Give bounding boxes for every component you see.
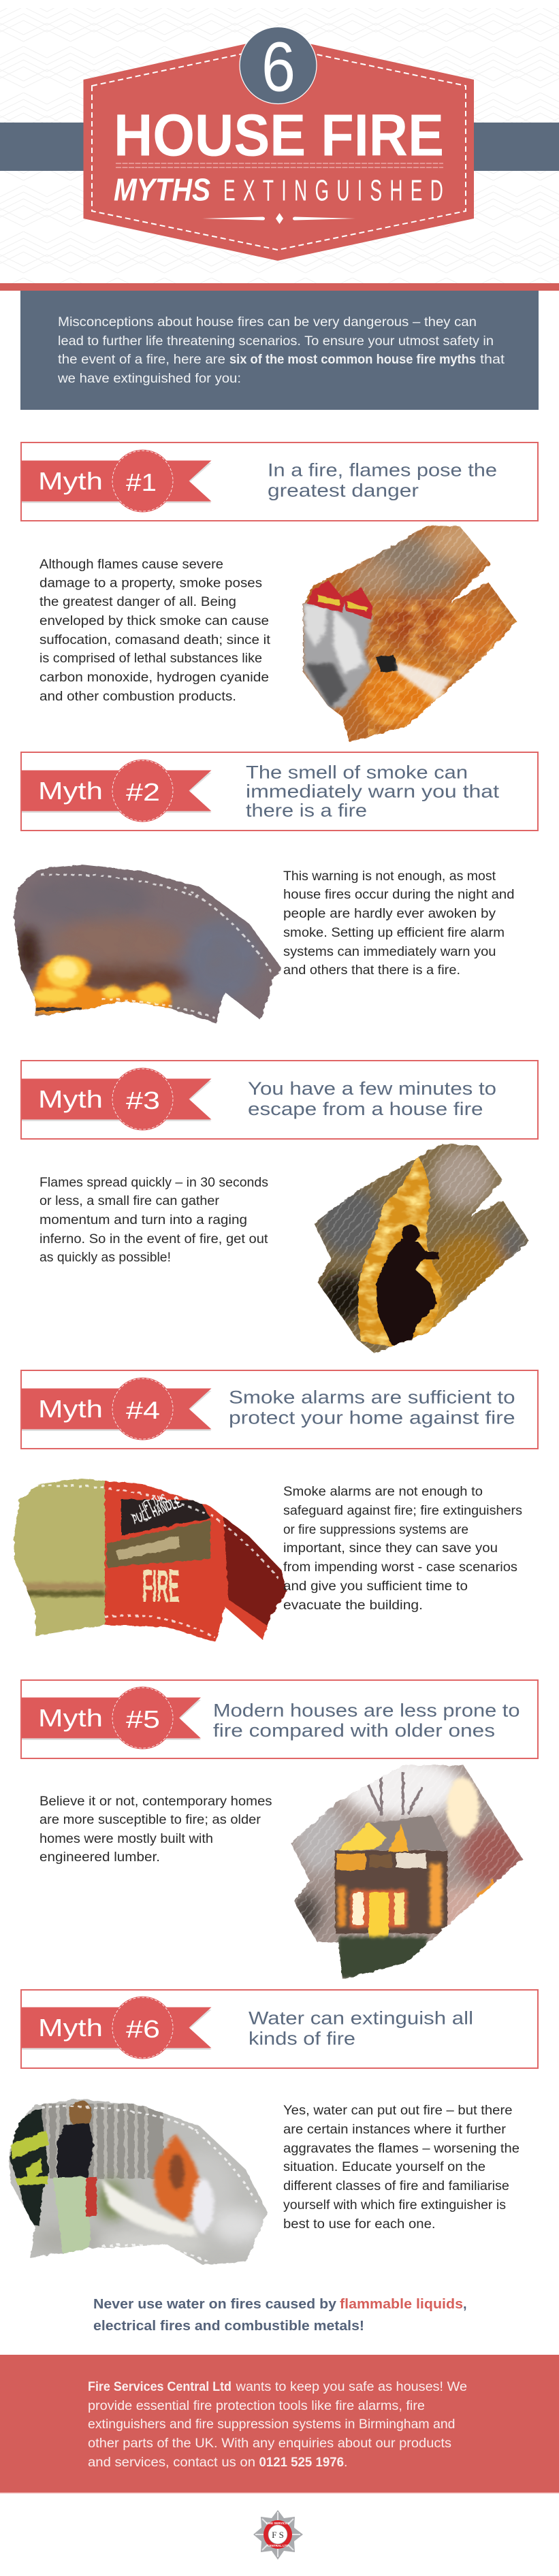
badge circle xyxy=(112,1996,174,2059)
intro panel: lead to further life threatening scenarios. To ensure your utmost safety in xyxy=(58,334,494,349)
myth 2 heading card: #2 xyxy=(126,778,160,806)
myth 3 body text: inferno. So in the event of fire, get out xyxy=(39,1232,268,1246)
myth 6 body text: Yes, water can put out fire – but there xyxy=(283,2104,512,2118)
ribbon shadow xyxy=(22,1081,211,1121)
myth statement: In a fire, flames pose the xyxy=(268,460,497,480)
footer panel: provide essential fire protection tools like fire alarms, fire xyxy=(88,2398,425,2413)
badge circle xyxy=(112,760,174,822)
myth 3 body text: Flames spread quickly – in 30 seconds xyxy=(39,1176,268,1190)
flame column xyxy=(357,1157,443,1347)
footer panel: and services, contact us on xyxy=(88,2455,255,2470)
myth 6 photo: extinguisher training xyxy=(7,2097,279,2267)
myth statement: The smell of smoke can xyxy=(246,762,468,782)
myth 2 body text xyxy=(283,869,515,978)
myth 6 body text: situation. Educate yourself on the xyxy=(283,2160,485,2174)
badge circle xyxy=(112,449,174,512)
myth statement: You have a few minutes to xyxy=(248,1078,496,1099)
subtitle: myths extinguished: MYTHS xyxy=(114,172,210,207)
flames xyxy=(154,2134,199,2223)
myth 6 body text xyxy=(283,2104,520,2232)
intro panel: the event of a fire, here are xyxy=(58,352,225,367)
ribbon xyxy=(22,771,211,811)
ribbon xyxy=(22,460,211,501)
flames top right xyxy=(447,1777,479,1837)
myth 5 body text: Believe it or not, contemporary homes xyxy=(39,1794,272,1809)
alarm labels xyxy=(131,1494,182,1603)
myth 6 body text: yourself with which fire extinguisher is xyxy=(283,2198,506,2212)
myth statement: Modern houses are less prone to xyxy=(213,1701,520,1721)
myth statement: Smoke alarms are sufficient to xyxy=(229,1387,515,1408)
intro panel xyxy=(20,291,539,410)
myth 2 body text: smoke. Setting up efficient fire alarm xyxy=(283,926,505,940)
logo: fire services central star badge: CENTRAL LTD xyxy=(267,2544,289,2547)
alarm labels: PULL HANDLE xyxy=(129,1493,183,1528)
myth 4 heading card xyxy=(21,1370,538,1449)
myth statement xyxy=(248,1078,496,1119)
myth 3 body text: as quickly as possible! xyxy=(39,1251,171,1265)
myth 6 heading card: #6 xyxy=(126,2015,160,2043)
myth label: Myth xyxy=(38,1085,103,1113)
intro panel: Misconceptions about house fires can be very dangerous – they can xyxy=(58,315,477,329)
subtitle: myths extinguished: EXTINGUISHED xyxy=(223,173,443,207)
myth 4 body text: from impending worst - case scenarios xyxy=(283,1560,517,1575)
footer panel: wants to keep you safe as houses! We xyxy=(235,2379,467,2394)
myth statement xyxy=(249,2008,473,2048)
silhouette xyxy=(376,1225,439,1349)
intro panel: that xyxy=(480,352,505,367)
myth 3 body text: or less, a small fire can gather xyxy=(39,1194,220,1208)
ribbon shadow xyxy=(22,463,211,503)
myth 6 body text: best to use for each one. xyxy=(283,2217,436,2232)
water spray xyxy=(396,662,451,701)
myth 4 body text: safeguard against fire; fire extinguishers xyxy=(283,1504,522,1518)
myth 4 heading card: #4 xyxy=(126,1396,160,1424)
title: house fire: HOUSE FIRE xyxy=(114,102,444,169)
myth statement xyxy=(213,1701,520,1741)
myth label: Myth xyxy=(38,777,103,805)
myth 4 photo: red fire alarm pull station xyxy=(14,1479,287,1642)
myth 5 body text: engineered lumber. xyxy=(39,1850,160,1865)
myth 3 photo: silhouette against flames xyxy=(315,1144,529,1353)
myth 6 heading card xyxy=(21,1990,538,2068)
alarm labels: FIRE xyxy=(142,1560,180,1612)
myth 3 heading card: #3 xyxy=(126,1086,160,1114)
warning note: , xyxy=(463,2297,467,2312)
footer panel: . xyxy=(344,2455,347,2470)
myth 1 heading card: #1 xyxy=(126,468,157,496)
myth statement xyxy=(229,1387,515,1428)
footer panel: Fire Services Central Ltd xyxy=(88,2379,231,2394)
ribbon xyxy=(22,1698,201,1739)
number circle xyxy=(240,27,317,106)
myth 4 body text: or fire suppressions systems are xyxy=(283,1523,468,1537)
ornament xyxy=(202,213,355,224)
myth 1 heading card xyxy=(21,442,538,521)
myth 5 body text xyxy=(39,1794,272,1865)
myth 1 body text: enveloped by thick smoke can cause xyxy=(39,614,269,628)
header: slate band xyxy=(0,123,559,171)
ribbon shadow xyxy=(22,1391,211,1431)
myth statement: immediately warn you that xyxy=(246,782,500,802)
myth 5 heading card: #5 xyxy=(126,1705,160,1733)
myth 4 body text: important, since they can save you xyxy=(283,1541,498,1556)
badge circle xyxy=(112,1687,174,1750)
bushes xyxy=(338,1937,428,1978)
warning note: flammable liquids xyxy=(340,2297,463,2312)
myth 2 body text: and others that there is a fire. xyxy=(283,963,460,978)
myth 6 body text: aggravates the flames – worsening the xyxy=(283,2142,520,2156)
myth 6 body text: different classes of fire and familiarise xyxy=(283,2179,509,2193)
footer panel xyxy=(0,2355,559,2493)
myth 2 body text: people are hardly ever awoken by xyxy=(283,907,496,921)
ribbon xyxy=(22,2007,211,2048)
badge circle xyxy=(112,1378,174,1440)
logo: fire services central star badge xyxy=(253,2510,303,2560)
title badge xyxy=(83,27,474,261)
myth label: Myth xyxy=(38,1395,103,1423)
flames xyxy=(33,956,171,1014)
ribbon shadow xyxy=(22,1700,201,1740)
myth statement xyxy=(246,762,500,820)
myth 1 body text: Although flames cause severe xyxy=(39,558,223,572)
myth label: Myth xyxy=(38,2014,103,2042)
myth statement xyxy=(268,460,497,500)
myth 5 body text: are more susceptible to fire; as older xyxy=(39,1813,261,1827)
myth statement: Water can extinguish all xyxy=(249,2008,473,2028)
badge circle xyxy=(112,1067,174,1130)
myth 1 body text: is comprised of lethal substances like xyxy=(39,651,262,666)
myth 4 body text: Smoke alarms are not enough to xyxy=(283,1485,483,1499)
footer panel: other parts of the UK. With any enquiries about our products xyxy=(88,2436,451,2451)
firefighter xyxy=(303,580,398,708)
myth 1 body text: carbon monoxide, hydrogen cyanide xyxy=(39,671,269,685)
myth statement: escape from a house fire xyxy=(248,1099,483,1119)
ribbon shadow xyxy=(22,773,211,813)
myth 3 body text: momentum and turn into a raging xyxy=(39,1213,247,1227)
myth statement: fire compared with older ones xyxy=(213,1720,495,1741)
header: chevron pattern background xyxy=(0,8,559,283)
firefighter xyxy=(10,2108,49,2226)
myth 1 body text xyxy=(39,558,271,704)
myth 1 photo: firefighter and flames xyxy=(302,526,517,742)
logo: fire services central star badge: F S xyxy=(272,2530,284,2540)
myth 1 body text: suffocation, comasand death; since it xyxy=(39,633,271,647)
myth 2 body text: systems can immediately warn you xyxy=(283,945,496,959)
myth 3 heading card xyxy=(21,1061,538,1139)
logo: fire services central star badge: FIRE SERVICES xyxy=(266,2522,289,2525)
myth 6 body text: are certain instances where it further xyxy=(283,2123,507,2137)
myth statement: greatest danger xyxy=(268,480,419,500)
myth 1 body text: and other combustion products. xyxy=(39,690,236,704)
myth 5 heading card xyxy=(21,1680,538,1758)
house xyxy=(335,1816,447,1940)
myth 1 body text: damage to a property, smoke poses xyxy=(39,576,262,591)
footer panel: extinguishers and fire suppression systems in Birmingham and xyxy=(88,2417,455,2432)
myth 4 body text xyxy=(283,1485,522,1613)
myth 5 body text: homes were mostly built with xyxy=(39,1832,213,1846)
myth 1 body text: the greatest danger of all. Being xyxy=(39,595,236,609)
myth 2 heading card xyxy=(21,752,538,831)
myth label: Myth xyxy=(38,467,103,495)
ribbon xyxy=(22,1389,211,1430)
footer panel: 0121 525 1976 xyxy=(259,2455,344,2470)
myth 2 body text: This warning is not enough, as most xyxy=(283,869,496,884)
warning note: Never use water on fires caused by xyxy=(93,2297,337,2312)
trainee xyxy=(53,2100,97,2253)
warning note: electrical fires and combustible metals! xyxy=(93,2319,364,2334)
number circle: 6 xyxy=(261,27,296,106)
myth statement: protect your home against fire xyxy=(229,1408,515,1428)
ribbon xyxy=(22,1078,211,1119)
myth label: Myth xyxy=(38,1704,103,1732)
intro panel: we have extinguished for you: xyxy=(57,371,241,386)
myth 5 photo: burning house xyxy=(291,1765,523,1979)
myth 4 body text: evacuate the building. xyxy=(283,1598,423,1613)
myth 2 body text: house fires occur during the night and xyxy=(283,888,515,902)
intro panel: six of the most common house fire myths xyxy=(229,352,476,367)
extinguisher spray xyxy=(101,2178,197,2236)
myth 3 body text xyxy=(39,1176,268,1265)
myth 4 body text: and give you sufficient time to xyxy=(283,1579,468,1594)
subtitle: myths extinguished xyxy=(114,172,443,207)
header: red divider bar xyxy=(0,283,559,291)
alarm labels: LIFT THIS xyxy=(137,1492,169,1516)
ribbon shadow xyxy=(22,2010,211,2050)
warning note xyxy=(93,2297,467,2334)
myth 2 photo: smoke and flames xyxy=(13,865,282,1024)
myth statement: kinds of fire xyxy=(249,2028,355,2048)
myth statement: there is a fire xyxy=(246,800,367,820)
